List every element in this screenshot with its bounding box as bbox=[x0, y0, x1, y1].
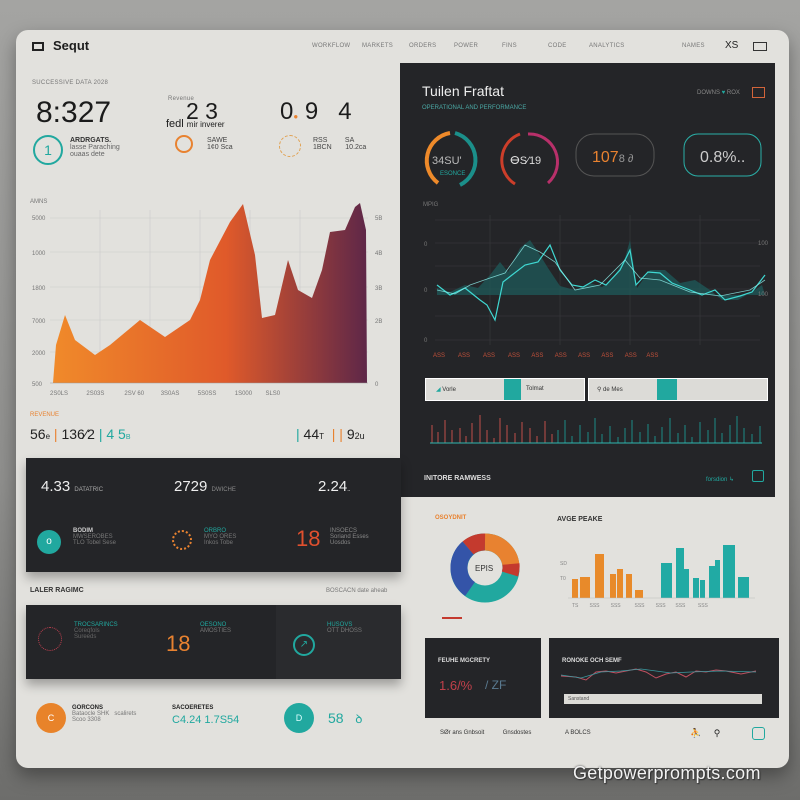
bottom left stats row: SACOERETES bbox=[172, 705, 213, 711]
bar charts: T0 bbox=[560, 576, 566, 582]
left dark panel 2: OESONO bbox=[200, 622, 226, 628]
line chart: 0 bbox=[424, 242, 428, 248]
toggle bars: Tolmat bbox=[526, 386, 544, 392]
dark box: failure: / ZF bbox=[485, 678, 506, 692]
left dark panel 1: BODIM bbox=[73, 528, 93, 534]
left dark panel 1: Soriand Esses bbox=[330, 534, 369, 540]
sparkline bars bbox=[430, 415, 762, 444]
nav links: MARKETS bbox=[362, 43, 393, 49]
ring icons row: 1 bbox=[44, 142, 52, 158]
bottom right footer: ⛹ ⚲ bbox=[690, 728, 720, 738]
KPI row top-left: fedl mir inverer bbox=[166, 118, 225, 130]
line chart: ASS ASS ASS ASS ASS ASS ASS ASS ASS ASS bbox=[433, 353, 658, 359]
left dark panel 2: Sureeds bbox=[74, 634, 96, 640]
left dark panel 1: MWSEROBES bbox=[73, 534, 113, 540]
right dark panel bbox=[400, 63, 775, 497]
text: BOSCACN date aheab bbox=[326, 588, 387, 594]
gauges: 0.8%.. bbox=[700, 149, 745, 166]
bar charts: AVGE PEAKE bbox=[557, 516, 602, 523]
big number: 8:327 bbox=[36, 96, 111, 129]
right dark panel: DOWNS ♥ ROX bbox=[697, 90, 740, 96]
donut chart section: OSOYDNIT bbox=[435, 515, 466, 521]
left dark panel 2 bbox=[26, 605, 401, 679]
nav links: FINS bbox=[502, 43, 517, 49]
area chart: 3B bbox=[375, 286, 382, 292]
line chart: 0 bbox=[424, 338, 428, 344]
area chart: 5000 bbox=[32, 216, 46, 222]
KPI row top-left: ARDRGATS. bbox=[70, 137, 111, 144]
line chart: 100 bbox=[758, 292, 769, 298]
bottom left stats row: Bataocle SHK scalirets bbox=[72, 711, 136, 717]
left dark panel 2: HUSOVS bbox=[327, 622, 352, 628]
line chart: 100 bbox=[758, 241, 769, 247]
toggle bars: ◢ Vorle bbox=[436, 387, 456, 393]
KPI row top-left bbox=[32, 80, 366, 165]
KPI row top-left: lasse Paraching bbox=[70, 144, 120, 151]
donut chart section bbox=[435, 514, 520, 619]
icon: teal ring: ↗ bbox=[300, 639, 308, 650]
area chart: 5B bbox=[375, 216, 382, 222]
dark box: sparkline: RONOKE OCH SEMF bbox=[562, 658, 622, 664]
KPI row top-left: ouaas dete bbox=[70, 151, 105, 158]
nav links: POWER bbox=[454, 43, 478, 49]
dark box: failure bbox=[425, 638, 541, 718]
left dark panel 1: INSOECS bbox=[330, 528, 357, 534]
bar charts bbox=[557, 516, 755, 609]
logo icon bbox=[32, 42, 44, 51]
area chart: 2B bbox=[375, 319, 382, 325]
header bar bbox=[32, 38, 767, 53]
area chart: AMNS bbox=[30, 199, 47, 205]
area chart: 4B bbox=[375, 251, 382, 257]
right dark panel: OPERATIONAL AND PERFORMANCE bbox=[422, 105, 526, 111]
left dark panel 2: OTT DHOSS bbox=[327, 628, 362, 634]
toggle bars bbox=[425, 378, 585, 401]
left dark panel 2: Coreqfols bbox=[74, 628, 100, 634]
bottom left stats row: GORCONS bbox=[72, 705, 103, 711]
bottom left stats row bbox=[36, 703, 362, 733]
area chart: 1800 bbox=[32, 286, 46, 292]
right dark panel: ⚲ de Mes bbox=[597, 387, 623, 393]
left dark panel 1 bbox=[26, 458, 401, 572]
dark box: sparkline: Sanstand bbox=[568, 696, 589, 702]
bottom left stats row: 58 ꝺ bbox=[328, 710, 362, 726]
left dark panel 1: MYO ORES bbox=[204, 534, 236, 540]
area chart: 500 bbox=[32, 382, 43, 388]
gauges: 34SU' bbox=[432, 155, 462, 167]
KPI row top-left: SUCCESSIVE DATA 2028 bbox=[32, 80, 108, 86]
line chart bbox=[423, 202, 769, 359]
section heading: INITORE RAMWESS bbox=[424, 475, 491, 482]
KPI row top-left: 2 3 bbox=[186, 98, 218, 124]
gauges: 1078 ∂ bbox=[592, 149, 634, 166]
brand title: Sequt bbox=[53, 38, 89, 53]
left dark panel 2: 18 bbox=[166, 631, 190, 656]
nav links: CODE bbox=[548, 43, 567, 49]
section label: LALER RAGIMC bbox=[30, 587, 84, 594]
bottom left stats row: C bbox=[48, 713, 54, 723]
bottom left stats row: Scoo 3308 bbox=[72, 717, 101, 723]
KPI row top-left: SAWE bbox=[207, 137, 227, 144]
area chart: 0 bbox=[375, 382, 379, 388]
small stat row bbox=[30, 412, 365, 442]
nav links: NAMES bbox=[682, 43, 705, 49]
left dark panel 2: TROCSARINCS bbox=[74, 622, 118, 628]
ring icons row bbox=[33, 135, 63, 165]
bar charts: SD bbox=[560, 561, 567, 567]
area chart: 7000 bbox=[32, 319, 46, 325]
nav links: WORKFLOW bbox=[312, 43, 350, 49]
watermark: Getpowerprompts.com bbox=[573, 763, 761, 783]
icon: dotted orange bbox=[172, 530, 192, 550]
small stat row: 56e | 136⁄2 | 4 5B bbox=[30, 426, 130, 442]
left dark panel 1: Inkos Tobe bbox=[204, 540, 233, 546]
nav links: ORDERS bbox=[409, 43, 436, 49]
dark box: sparkline bbox=[549, 638, 779, 718]
area chart bbox=[30, 198, 382, 397]
nav links bbox=[312, 42, 705, 49]
dark box: failure: 1.6/% bbox=[439, 678, 472, 693]
left dark panel 1: 4.33 DATATRIC bbox=[41, 478, 103, 495]
gauges: ⴱS⁄19 bbox=[510, 155, 541, 167]
dark box: failure: FEUHE MGCRETY bbox=[438, 658, 490, 664]
left dark panel 1: ORBRO bbox=[204, 528, 226, 534]
bottom right footer: A BOLCS bbox=[565, 730, 591, 736]
KPI row top-left: RSS SA bbox=[313, 137, 354, 144]
gauges bbox=[424, 131, 762, 187]
bottom left stats row: C4.24 1.7S54 bbox=[172, 714, 239, 726]
icon: teal ring bbox=[293, 634, 315, 656]
line chart: MPIG bbox=[423, 202, 439, 208]
bar charts: TS SSS SSS SSS SSS SSS SSS bbox=[572, 603, 709, 609]
icon: teal circle bbox=[37, 530, 61, 554]
icon: teal circle: o bbox=[46, 536, 52, 547]
donut chart section: EPIS bbox=[475, 564, 493, 573]
KPI row top-left: 0● 9 4 bbox=[280, 98, 352, 125]
bottom right footer: SØr ans Gnbsoit Gnsdostes bbox=[440, 730, 531, 736]
left dark panel 1: Uosdos bbox=[330, 540, 350, 546]
area chart: 1000 bbox=[32, 251, 46, 257]
small stat row: | 44T | | 92u bbox=[296, 426, 365, 442]
KPI row top-left: 1BCN 10.2ca bbox=[313, 144, 366, 151]
line chart: 0 bbox=[424, 288, 428, 294]
KPI row top-left: 1¢0 Sca bbox=[207, 144, 233, 151]
KPI row top-left: Revenue bbox=[168, 96, 194, 102]
header bar: XS bbox=[725, 40, 738, 51]
nav links: ANALYTICS bbox=[589, 43, 625, 49]
area chart: 2S0LS 2S03S 2SV 60 3S0AS 5S0SS 1S000 SLS0 bbox=[50, 391, 281, 397]
gauges: ESONCE bbox=[440, 171, 465, 177]
left dark panel 2: AMOSTIES bbox=[200, 628, 231, 634]
area chart: 2000 bbox=[32, 351, 46, 357]
left dark panel 1: 18 bbox=[296, 526, 320, 551]
panel title: Tuilen Fraftat bbox=[422, 83, 504, 99]
left dark panel 1: 2729 DWICHE bbox=[174, 478, 236, 495]
left dark panel 1: TLO Tobel Sese bbox=[73, 540, 116, 546]
bottom right footer bbox=[440, 727, 765, 740]
bottom left stats row: D bbox=[296, 713, 302, 723]
left dark panel 1: 2.24.. bbox=[318, 478, 351, 495]
right dark panel: forsdion ↳ bbox=[706, 477, 734, 483]
small stat row: REVENUE bbox=[30, 412, 59, 418]
